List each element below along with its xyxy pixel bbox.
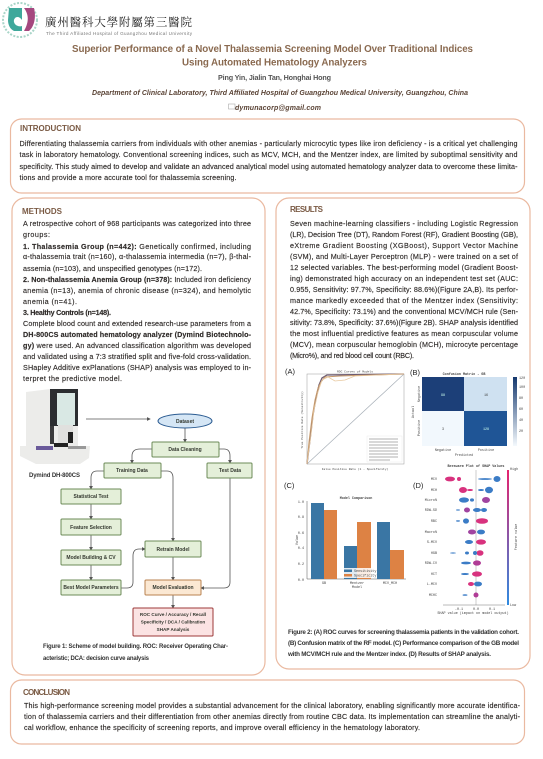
- node: feature selection: [61, 519, 121, 535]
- title: [72, 44, 474, 68]
- chart: model comparison bars: Model Comparison: [340, 496, 372, 501]
- text: methods body: assemia (n=103), and unspecified genotypes (n=172).: [23, 264, 202, 273]
- node: statistical test: Statistical Test: [74, 494, 109, 500]
- title: Using Automated Hematology Analyzers: [182, 58, 368, 68]
- node: retrain model: [145, 541, 201, 557]
- node: retrain model: Retrain Model: [156, 547, 190, 553]
- caption: figure 2: (B) Confusion matrix of the RF model. (C) Performance comparison of the GB model: [288, 640, 519, 647]
- chart label: B: (B): [410, 368, 420, 377]
- chart: confusion matrix: Negative: [435, 448, 451, 453]
- text: results body: sitivity: 73.8%, Specificity: 37.6%)(Figure 2B). SHAP analysis identified: [290, 318, 518, 327]
- text: conclusion body: This high-performance screening model provides a substantial advancement for the clinical laboratory, enabling significantly more accurate identifica-: [24, 701, 521, 710]
- chart: confusion matrix: 80: [519, 397, 523, 401]
- label: analyzer name: Dymind DH-800CS: [29, 473, 80, 479]
- text: methods body: anemia (n=41).: [23, 297, 77, 306]
- node: training data: Training Data: [116, 468, 148, 474]
- panel: conclusion: [10, 680, 524, 744]
- node: analysis outputs: Specificity / DCA / Calibration: [141, 620, 205, 624]
- caption: figure 2: Figure 2: (A) ROC curves for screening thalassemia patients in the validation cohort.: [288, 629, 519, 636]
- text: results body: Seven machine-learning classifiers - including Logistic Regression: [290, 219, 518, 228]
- panel: results: [276, 198, 530, 669]
- text: results body: mance markedly exceeded that of the Mentzer index (Sensitivity:: [290, 296, 518, 305]
- chart: SHAP beeswarm: RDW-CV: [425, 562, 438, 566]
- text: methods body: 3. Healthy Controls (n=148).: [23, 308, 111, 317]
- chart: model comparison bars: [295, 496, 406, 590]
- chart: SHAP beeswarm: High: [510, 467, 518, 472]
- chart: SHAP beeswarm: Low: [510, 604, 516, 608]
- chart: confusion matrix: Confusion Matrix - GB: [443, 372, 485, 377]
- text: results body: ing) demonstrated high accuracy on an independent test set (AUC:: [290, 274, 518, 283]
- caption: figure 1: acteristic; DCA: decision curve analysis: [43, 656, 150, 662]
- chart: confusion matrix: 3: [442, 428, 444, 432]
- node: best model parameters: Best Model Parameters: [63, 585, 119, 591]
- node: data cleaning: [152, 442, 219, 457]
- node: training data: [104, 463, 161, 478]
- node: feature selection: Feature Selection: [70, 525, 112, 531]
- text: methods body: [23, 219, 252, 383]
- email: dymunacorp@gmail.com: [235, 105, 321, 112]
- chart: SHAP beeswarm: 0.0: [473, 608, 479, 612]
- chart: model comparison bars: 0.8: [298, 516, 304, 520]
- title: Superior Performance of a Novel Thalassemia Screening Model Over Traditional Indices: [72, 44, 474, 55]
- chart: confusion matrix: 128: [483, 428, 489, 432]
- chart: SHAP beeswarm: Feature value: [514, 524, 519, 550]
- chart: SHAP beeswarm: HGB: [431, 552, 437, 556]
- text: methods body: Complete blood count and extended research-use parameters from a: [23, 319, 251, 328]
- chart: confusion matrix: Negative: [417, 386, 422, 402]
- text: conclusion body: cal workflow, enhance the specificity of screening reports, and improve overall efficiency in the hematology laboratory.: [24, 723, 420, 732]
- chart: confusion matrix: 120: [519, 377, 525, 381]
- text: methods body: 2. Non-thalassemia Anemia Group (n=378): Included iron deficiency: [23, 275, 251, 284]
- panel: introduction: [10, 119, 524, 193]
- chart: confusion matrix: 100: [519, 386, 525, 390]
- node: best model parameters: [61, 580, 121, 595]
- text: results body: (MCV), mean corpuscular hemoglobin (MCH), microcyte percentage: [290, 340, 518, 349]
- chart: model comparison bars: Model: [352, 585, 362, 590]
- chart: model comparison bars: 0.0: [298, 579, 304, 583]
- chart: confusion matrix: Positive: [478, 448, 494, 453]
- chart: SHAP beeswarm: Beeswarm Plot of SHAP Values: [448, 464, 504, 469]
- chart: SHAP beeswarm: MCHC: [429, 594, 437, 598]
- chart: SHAP beeswarm: 0.1: [489, 608, 495, 612]
- text: methods body: groups:: [23, 230, 50, 239]
- affiliation: Department of Clinical Laboratory, Third Affiliated Hospital of Guangzhou Medical University, Guangzhou, China: [92, 90, 468, 97]
- text: results body: the most influential predictive features as mean corpuscular volume: [290, 329, 518, 338]
- text: results body: (Micro%), and red blood cell count (RBC).: [290, 351, 414, 360]
- text: methods body: 1. Thalassemia Group (n=442): Genetically confirmed, including: [23, 242, 251, 251]
- heading: conclusion: CONCLUSION: [23, 688, 70, 697]
- chart: SHAP beeswarm: HCT: [431, 573, 437, 577]
- text: methods body: α-thalassemia trait (n=160), α-thalassemia intermedia (n=7), β-thal-: [23, 252, 252, 261]
- arrow: analyzer to dataset: [86, 418, 150, 420]
- chart: model comparison bars: 0.6: [298, 532, 304, 536]
- chart: SHAP beeswarm: Macro%: [425, 530, 438, 535]
- chart label: A: (A): [285, 367, 296, 376]
- chart: confusion matrix: 40: [519, 419, 523, 423]
- chart: model comparison bars: 1.0: [298, 501, 304, 505]
- chart legend: [343, 568, 376, 578]
- chart: model comparison bars: 0.2: [298, 563, 304, 567]
- icon: hospital logo: [3, 3, 37, 37]
- text: results body: (SVM), and Multi-Layer Perceptron (MLP) - were trained on a set of: [290, 252, 518, 261]
- node: test data: [207, 463, 252, 478]
- caption: figure 2: [287, 629, 519, 658]
- text: introduction body: task in laboratory hematology. Conventional screening indices, such as MCV, MCH, and the Mentzer index, are limited by suboptimal sensitivity and: [20, 150, 518, 159]
- icon: hematology analyzer: [20, 389, 90, 464]
- chart: model comparison bars: Value: [295, 535, 300, 545]
- chart: ROC curves: ROC Curves of Models: [337, 370, 373, 374]
- chart: confusion matrix: 98: [441, 394, 445, 398]
- chart: SHAP beeswarm: Micro%: [425, 498, 438, 503]
- text: conclusion body: tion of thalassemia carriers and their differentiation from other anemias directly from routine CBC data. Its implementation can streamline the analyti-: [24, 712, 521, 721]
- text: methods body: terpret the predictive model.: [23, 374, 122, 383]
- node: test data: Test Data: [219, 468, 241, 474]
- text: results body: 0.955, Sensitivity: 97.7%, Specificity: 88.6%)(Figure 2A,B). Its perfor-: [290, 285, 519, 294]
- text: introduction body: Differentiating thalassemia carriers from individuals with other anemias - particularly microcytic types like iron deficiency - is a critical yet challenging: [20, 139, 518, 148]
- text: introduction body: [20, 139, 518, 182]
- chart: confusion matrix: Actual: [411, 406, 416, 418]
- text: introduction body: specificity. This study aimed to develop and validate an advanced analytical model using automated hematology analyzer data to overcome these limita-: [20, 162, 518, 171]
- chart: ROC curves: False Positive Rate (1 - Specificity): [322, 467, 388, 471]
- chart legend: [367, 436, 402, 462]
- chart: SHAP beeswarm: L-MCV: [427, 583, 438, 587]
- chart: confusion matrix: Positive: [417, 420, 422, 436]
- chart: confusion matrix: [411, 372, 525, 458]
- text: results body: 12 selected variables. The best-performing model (Gradient Boost-: [290, 263, 519, 272]
- heading: results: RESULTS: [290, 205, 324, 214]
- chart: ROC curves: [300, 370, 404, 471]
- caption: figure 2: with MCV/MCH rule and the Mentzer index. (D) Results of SHAP analysis.: [287, 651, 491, 658]
- chart label: C: (C): [284, 481, 295, 490]
- caption: figure 1: Figure 1: Scheme of model building. ROC: Receiver Operating Char-: [43, 644, 228, 650]
- chart: confusion matrix: 16: [484, 394, 488, 398]
- text: methods body: and validated using a 7:3 stratified split and five-fold cross-validation.: [23, 352, 251, 361]
- chart: confusion matrix: Predicted: [455, 453, 473, 458]
- text: methods body: anemia (n=13), anemia of chronic disease (n=324), and hemolytic: [23, 286, 251, 295]
- text: methods body: gy) were used. An advanced classification algorithm was developed: [23, 341, 251, 350]
- chart label: D: (D): [413, 481, 424, 490]
- authors: Ping Yin, Jialin Tan, Honghai Hong: [218, 73, 331, 82]
- node: model building and cv: [61, 550, 121, 565]
- chart: SHAP beeswarm: RBC: [431, 520, 437, 524]
- chart legend: Specificity: [354, 574, 376, 578]
- text: methods body: A retrospective cohort of 968 participants was categorized into three: [23, 219, 251, 228]
- chart legend: Sensitivity: [354, 569, 376, 574]
- chart: model comparison bars: 0.4: [298, 547, 304, 551]
- logo text: hospital name: 廣州醫科大學附屬第三醫院: [45, 14, 192, 30]
- text: results body: 42.7%, Specificity: 73.1%) and the conventional MCV/MCH rule (Sen-: [290, 307, 519, 316]
- node: model evaluation: Model Evaluation: [152, 585, 194, 591]
- node: dataset: [158, 414, 212, 428]
- flowchart: model building: [61, 414, 252, 636]
- node: dataset: Dataset: [176, 419, 194, 425]
- text: results body: (LR), Decision Tree (DT), Random Forest (RF), Gradient Boosting (GB),: [290, 230, 518, 239]
- logo text: hospital name: The Third Affiliated Hospital of Guangzhou Medical University: [46, 31, 193, 36]
- text: results body: [290, 219, 519, 360]
- caption: figure 1: [43, 644, 228, 662]
- chart: SHAP beeswarm: [425, 464, 519, 616]
- heading: introduction: INTRODUCTION: [20, 124, 81, 133]
- chart: model comparison bars: GB: [322, 582, 326, 586]
- text: introduction body: tions and provide a more accurate tool for thalassemia screening.: [20, 173, 236, 182]
- node: model evaluation: [145, 580, 201, 595]
- chart: SHAP beeswarm: MCV: [431, 478, 438, 482]
- panel: methods: [12, 198, 265, 675]
- chart: SHAP beeswarm: S-MCV: [427, 541, 438, 545]
- node: data cleaning: Data Cleaning: [168, 447, 202, 453]
- chart: SHAP beeswarm: SHAP value (impact on model output): [437, 611, 509, 616]
- chart: SHAP beeswarm: MCH: [431, 489, 437, 493]
- node: analysis outputs: [133, 608, 213, 636]
- node: analysis outputs: SHAP Analysis: [157, 627, 190, 632]
- text: results body: eXtreme Gradient Boosting (XGBoost), Support Vector Machine: [290, 241, 518, 250]
- chart: confusion matrix: 20: [519, 430, 523, 434]
- chart: confusion matrix: 60: [519, 408, 523, 412]
- text: methods body: DH-800CS automated hematology analyzer (Dymind Biotechnolo-: [23, 330, 252, 339]
- text: conclusion body: [24, 701, 521, 732]
- node: statistical test: [61, 489, 121, 504]
- text: methods body: SHapley Additive exPlanations (SHAP) analysis was employed to in-: [23, 363, 252, 372]
- chart: model comparison bars: MCV_MCH: [383, 582, 397, 586]
- node: analysis outputs: ROC Curve / Accuracy / Recall: [140, 612, 206, 617]
- chart: ROC curves: True Positive Rate (Sensitivity): [300, 391, 304, 449]
- chart: model comparison bars: Mentzer: [350, 581, 364, 586]
- chart: SHAP beeswarm: RDW-SD: [425, 509, 437, 513]
- chart: SHAP beeswarm: -0.1: [455, 608, 463, 612]
- node: model building and cv: Model Building & CV: [66, 555, 116, 561]
- heading: methods: METHODS: [22, 207, 63, 216]
